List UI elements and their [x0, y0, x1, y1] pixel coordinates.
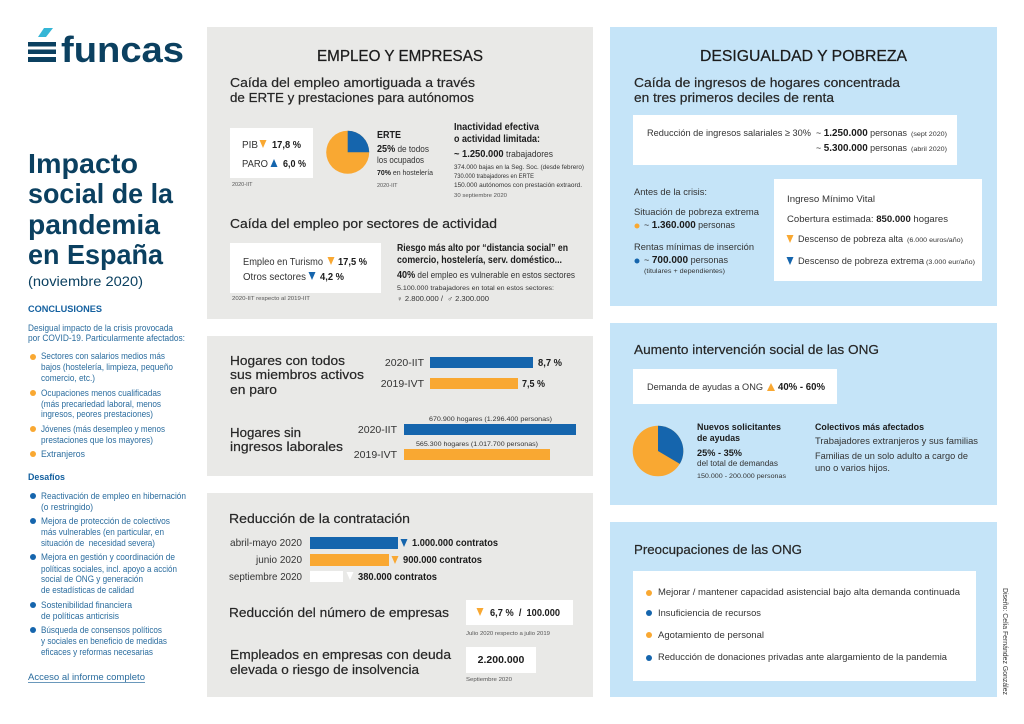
card: PIB y paro: PIB [242, 139, 258, 151]
card: ingreso minimo vital: Cobertura estimada: 850.000 hogares [787, 214, 948, 225]
card: lista de preocupaciones [633, 571, 976, 681]
heading: hogares en paro: en paro [230, 382, 277, 397]
heading: hogares en paro [230, 353, 365, 397]
card: reduccion de ingresos: ~ 5.300.000 personas [816, 142, 907, 154]
heading: hogares sin ingresos: ingresos laborales [230, 439, 344, 454]
text: nuevos solicitantes: Nuevos solicitantes [697, 422, 781, 433]
challenges list: de políticas anticrisis [41, 611, 119, 622]
card: PIB y paro: 6,0 % [283, 158, 307, 170]
conclusions intro: Desigual impacto de la crisis provocada [28, 323, 174, 334]
text: ERTE: 70% en hostelería [377, 170, 433, 177]
panel: reduccion [207, 493, 593, 697]
text: inactividad efectiva: 150.000 autónomos con prestación extraord. [454, 183, 582, 189]
panel: empleo y empresas [207, 27, 593, 319]
text: inactividad efectiva: 374.000 bajas en la Seg. Soc. (desde febrero) [454, 165, 584, 171]
card: demanda de ayudas: 40% - 60% [778, 381, 826, 393]
text: nuevos solicitantes: 25% - 35% [697, 448, 743, 459]
subheading: caida de ingresos [634, 75, 901, 105]
note: julio: Julio 2020 respecto a julio 2019 [466, 631, 550, 637]
heading: hogares sin ingresos [230, 425, 344, 454]
text: ERTE: 25% de todos [377, 143, 429, 155]
card: PIB y paro: 17,8 % [272, 139, 302, 151]
title [28, 148, 173, 289]
card: turismo y otros sectores: Empleo en Turismo [243, 256, 323, 268]
heading: empleados en empresas [230, 647, 452, 677]
challenges list: Reactivación de empleo en hibernación [41, 491, 186, 502]
card: reduccion de ingresos: (abril 2020) [911, 147, 947, 153]
heading: aumento intervencion: Aumento intervención social de las ONG [634, 342, 879, 357]
card: PIB y paro [230, 128, 313, 178]
title: en España [28, 239, 163, 270]
heading: hogares sin ingresos: Hogares sin [230, 425, 301, 440]
panel: intervencion social ONG [610, 323, 997, 505]
heading: numero de empresas: Reducción del número de empresas [229, 605, 450, 620]
card: demanda de ayudas: Demanda de ayudas a ONG [647, 382, 763, 393]
bar chart: hogares en paro: 7,5 % [522, 378, 546, 390]
challenges heading: Desafíos [28, 472, 65, 483]
pie chart: nuevos solicitantes [633, 426, 683, 476]
card: reduccion de ingresos: ~ 1.250.000 personas [816, 127, 907, 139]
subheading: caida del empleo [230, 75, 476, 105]
bar chart: hogares sin ingresos: 2020-IIT [358, 424, 398, 436]
text: inactividad efectiva [454, 121, 584, 199]
bar chart: contratos: septiembre 2020 [229, 571, 302, 583]
bar chart: contratos: 900.000 contratos [403, 554, 482, 566]
text: riesgo distancia social: ♀ 2.800.000 / ♂ 2.300.000 [397, 296, 489, 303]
bar chart: contratos [229, 537, 498, 583]
heading: empleados en empresas: elevada o riesgo de insolvencia [230, 662, 420, 677]
conclusions intro [28, 323, 185, 344]
conclusions list: Jóvenes (más desempleo y menos [41, 424, 165, 435]
challenges list: situación de necesidad severa) [41, 538, 155, 549]
text: riesgo distancia social: Riesgo más alto por “distancia social” en [397, 242, 568, 254]
note: turismo: 2020-IIT respecto al 2019-IIT [232, 296, 311, 302]
credit: Diseño: Celia Fernández González [1001, 588, 1008, 695]
card: reduccion de ingresos: (sept 2020) [911, 132, 947, 138]
conclusions list: Sectores con salarios medios más [41, 351, 165, 362]
text: nuevos solicitantes [697, 422, 786, 480]
challenges list: eficaces y reformas necesarias [41, 647, 153, 658]
heading: empleados en empresas: Empleados en empresas con deuda [230, 647, 452, 662]
text: antes de la crisis: Rentas mínimas de inserción [634, 242, 754, 253]
card: PIB y paro: PARO [242, 158, 268, 170]
card: ingreso minimo vital: (6.000 euros/año) [907, 238, 963, 244]
bar chart: contratos: abril-mayo 2020 [230, 537, 302, 549]
text: riesgo distancia social: 40% del empleo es vulnerable en estos sectores [397, 269, 575, 281]
text: inactividad efectiva: 30 septiembre 2020 [454, 193, 507, 199]
text: nuevos solicitantes: del total de demandas [697, 459, 778, 468]
challenges list: social de ONG y generación [41, 574, 143, 585]
bar chart: hogares sin ingresos: 565.300 hogares (1.017.700 personas) [416, 442, 538, 448]
text: riesgo distancia social [397, 242, 575, 303]
heading: desigualdad y pobreza: DESIGUALDAD Y POBREZA [700, 48, 907, 65]
bar chart: hogares en paro: 2020-IIT [385, 357, 425, 369]
challenges list: de estadísticas de calidad [41, 585, 134, 596]
text: antes de la crisis: (titulares + dependientes) [644, 269, 725, 275]
heading: preocupaciones: Preocupaciones de las ONG [634, 542, 802, 557]
card: demanda de ayudas [633, 369, 837, 404]
text: inactividad efectiva: o actividad limitada: [454, 133, 540, 145]
text: inactividad efectiva: Inactividad efectiva [454, 121, 539, 133]
bar chart: contratos: 380.000 contratos [358, 571, 437, 583]
sidebar [28, 28, 186, 683]
challenges list: Sostenibilidad financiera [41, 600, 133, 611]
note: 2020-IIT: 2020-IIT [232, 182, 253, 188]
card: reduccion empresas: 6,7 % / 100.000 [490, 607, 560, 619]
card: turismo y otros sectores: 4,2 % [320, 271, 345, 283]
card: empleados [466, 647, 536, 673]
text: colectivos mas afectados: Familias de un solo adulto a cargo de [815, 451, 968, 462]
text: ERTE: los ocupados [377, 155, 424, 166]
challenges list: Mejora de protección de colectivos [41, 516, 170, 527]
challenges list: y sociales en beneficio de medidas [41, 636, 167, 647]
card: ingreso minimo vital [774, 179, 982, 281]
bar chart: hogares sin ingresos: 2019-IVT [354, 449, 398, 461]
card: lista de preocupaciones: Agotamiento de personal [658, 630, 764, 641]
report link: Acceso al informe completo [28, 672, 145, 683]
text: colectivos mas afectados [815, 422, 978, 474]
subheading: caida por sectores: Caída del empleo por sectores de actividad [230, 216, 497, 231]
challenges list: Mejora en gestión y coordinación de [41, 552, 175, 563]
conclusions heading: CONCLUSIONES [28, 304, 102, 315]
conclusions list: prestaciones que los mayores) [41, 435, 153, 446]
bar chart: hogares sin ingresos: 670.900 hogares (1.296.400 personas) [429, 417, 552, 423]
heading: empleo y empresas: EMPLEO Y EMPRESAS [317, 48, 483, 65]
text: colectivos mas afectados: uno o varios hijos. [815, 463, 890, 474]
bar chart: hogares sin ingresos [354, 417, 576, 461]
text: ERTE: 2020-IIT [377, 183, 398, 189]
heading: hogares en paro: sus miembros activos [230, 367, 365, 382]
challenges list: Búsqueda de consensos políticos [41, 625, 162, 636]
card: empleados: 2.200.000 [478, 654, 525, 666]
text: riesgo distancia social: 5.100.000 trabajadores en total en estos sectores: [397, 286, 554, 292]
text: nuevos solicitantes: de ayudas [697, 433, 740, 444]
card: lista de preocupaciones: Insuficiencia de recursos [658, 608, 761, 619]
conclusions list [30, 351, 173, 460]
card: turismo y otros sectores: Otros sectores [243, 271, 306, 283]
text: antes de la crisis [634, 187, 760, 275]
subheading: caida del empleo: Caída del empleo amortiguada a través [230, 75, 476, 90]
bar chart: hogares en paro [381, 357, 563, 390]
card: ingreso minimo vital: Descenso de pobreza extrema [798, 256, 925, 267]
challenges list: más vulnerables (en particular, en [41, 527, 164, 538]
bar chart: hogares en paro: 2019-IVT [381, 378, 425, 390]
card: ingreso minimo vital: (3.000 eur/año) [926, 260, 975, 266]
text: inactividad efectiva: 730.000 trabajadores en ERTE [454, 174, 534, 180]
panel: desigualdad y pobreza [610, 27, 997, 306]
card: lista de preocupaciones: Mejorar / mantener capacidad asistencial bajo alta demanda continuada [658, 587, 961, 598]
text: nuevos solicitantes: 150.000 - 200.000 personas [697, 474, 786, 480]
text: ERTE: ERTE [377, 129, 401, 141]
conclusions list: bajos (hostelería, limpieza, pequeño [41, 362, 173, 373]
subheading: caida de ingresos: Caída de ingresos de hogares concentrada [634, 75, 901, 90]
card: lista de preocupaciones: Reducción de donaciones privadas ante alargamiento de la pandemia [658, 652, 948, 663]
text: antes de la crisis: Situación de pobreza extrema [634, 207, 760, 218]
conclusions list: (más precariedad laboral, menos [41, 399, 161, 410]
bar chart: hogares en paro: 8,7 % [538, 357, 563, 369]
card: ingreso minimo vital: Descenso de pobreza alta [798, 234, 904, 245]
conclusions list: Extranjeros [41, 449, 85, 460]
bar chart: contratos: 1.000.000 contratos [412, 537, 498, 549]
logo: funcas [61, 29, 184, 70]
pie chart: ERTE 25% [326, 131, 369, 174]
conclusions intro: por COVID-19. Particularmente afectados: [28, 333, 185, 344]
text: antes de la crisis: ~ 1.360.000 personas [644, 219, 735, 231]
subheading: caida de ingresos: en tres primeros deciles de renta [634, 90, 835, 105]
card: ingreso minimo vital: Ingreso Mínimo Vital [787, 194, 875, 205]
title: (noviembre 2020) [28, 273, 143, 289]
note: septiembre: Septiembre 2020 [466, 677, 512, 683]
text: antes de la crisis: ~ 700.000 personas [644, 254, 728, 266]
conclusions list: ingresos, peores prestaciones) [41, 409, 153, 420]
text: ERTE [377, 129, 433, 189]
card: reduccion de ingresos [633, 115, 957, 165]
title: pandemia [28, 209, 160, 240]
card: turismo y otros sectores [230, 243, 381, 293]
bar chart: contratos: junio 2020 [255, 554, 302, 566]
card: reduccion empresas [466, 600, 573, 625]
conclusions list: comercio, etc.) [41, 373, 95, 384]
heading: hogares en paro: Hogares con todos [230, 353, 346, 368]
card: reduccion de ingresos: Reducción de ingresos salariales ≥ 30% [647, 128, 812, 139]
title: social de la [28, 178, 173, 209]
card: turismo y otros sectores: 17,5 % [338, 256, 368, 268]
heading: reduccion de la contratacion: Reducción de la contratación [229, 511, 410, 526]
conclusions list: Ocupaciones menos cualificadas [41, 388, 161, 399]
panel: hogares [207, 336, 593, 476]
text: riesgo distancia social: comercio, hostelería, serv. doméstico... [397, 254, 562, 266]
text: colectivos mas afectados: Colectivos más afectados [815, 422, 924, 433]
challenges list: (o restringido) [41, 502, 93, 513]
panel: preocupaciones ONG [610, 522, 997, 697]
challenges list [30, 491, 186, 658]
subheading: caida del empleo: de ERTE y prestaciones para autónomos [230, 90, 475, 105]
text: colectivos mas afectados: Trabajadores extranjeros y sus familias [815, 436, 978, 447]
text: inactividad efectiva: ~ 1.250.000 trabajadores [454, 148, 553, 160]
title: Impacto [28, 148, 138, 179]
text: antes de la crisis: Antes de la crisis: [634, 187, 707, 198]
challenges list: políticas sociales, incl. apoyo a acción [41, 564, 177, 575]
